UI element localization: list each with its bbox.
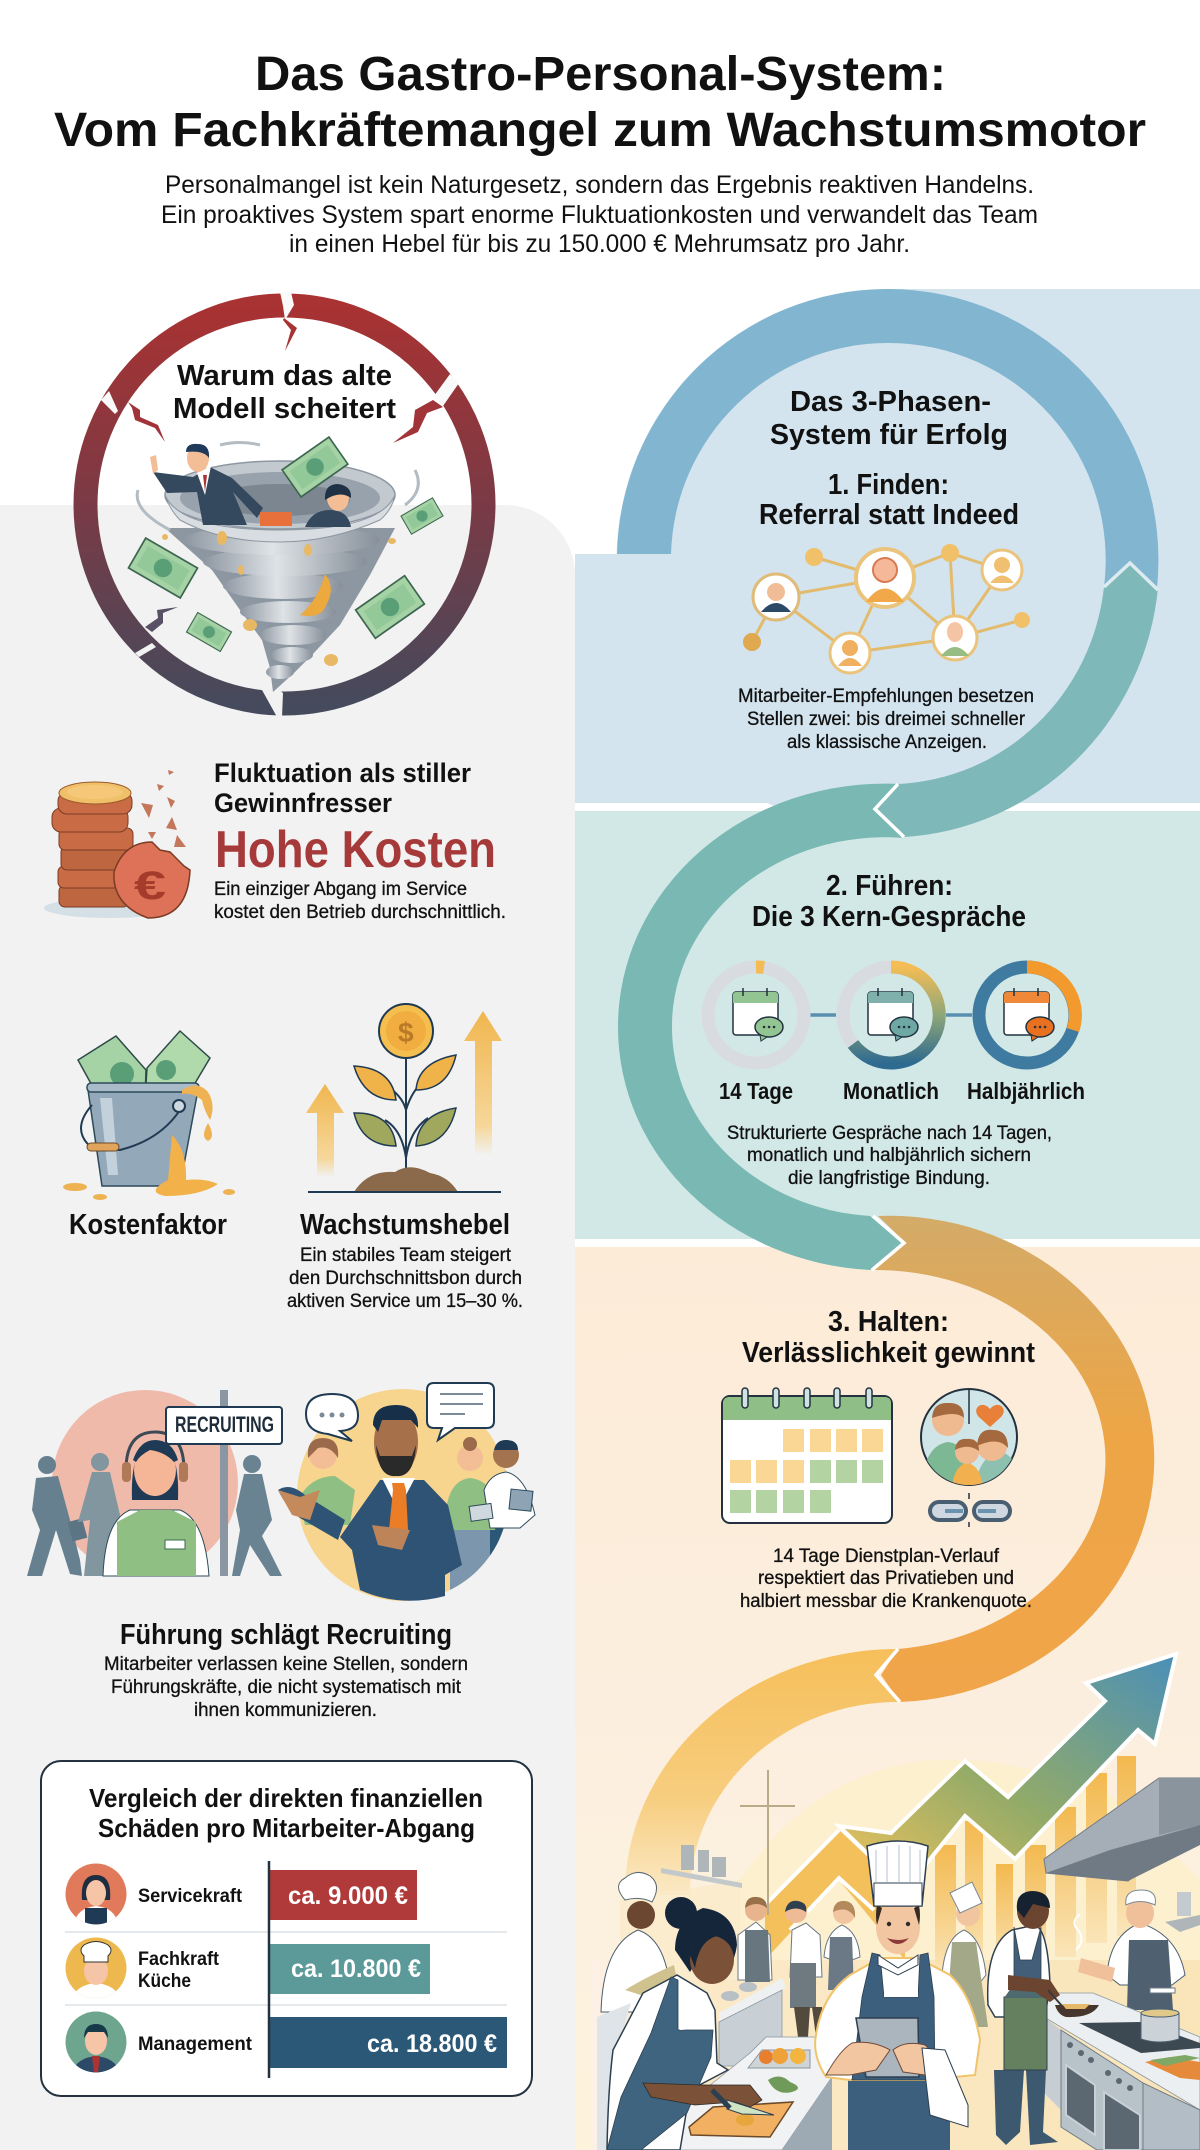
heading: 3. Halten [742, 1306, 1035, 1369]
subtitle text block [161, 171, 1038, 258]
icon: leaking bucket with money [63, 1031, 235, 1200]
stove cook [988, 1891, 1099, 2145]
ring labels: Monatlich [843, 1078, 939, 1104]
text: leadership: Mitarbeiter verlassen keine Stellen, sondern [104, 1654, 468, 1675]
text: structured talks: monatlich und halbjährlich sichern [747, 1145, 1031, 1166]
heading: 2. Führen [752, 870, 1026, 933]
row: Servicekraft [65, 1863, 417, 1925]
arrow: phase 2 teal band [618, 784, 904, 1270]
shelves [661, 1770, 1200, 1932]
arrow: phase 4 yellow band [625, 1649, 900, 1895]
text: referrals: als klassische Anzeigen. [787, 732, 987, 753]
heading: 1. Finden: Referral statt Indeed [759, 499, 1019, 531]
text: leadership: Führungskräfte, die nicht systematisch mit [111, 1677, 462, 1698]
panel: Fluktuation [44, 758, 506, 923]
text: referrals: Stellen zwei: bis dreimei schneller [747, 709, 1026, 730]
text: service cost: kostet den Betrieb durchschnittlich. [214, 902, 506, 923]
icon: family [921, 1388, 1020, 1486]
ring labels: Halbjährlich [967, 1078, 1085, 1104]
row: Fachkraft Küche: Fachkraft [138, 1949, 220, 1970]
row: Management [65, 2011, 507, 2073]
prep counter [680, 2036, 832, 2150]
arrow: teal connector [875, 563, 1158, 837]
illustration: recruiting [27, 1390, 282, 1576]
phase 3: Halten [722, 1306, 1035, 1612]
title [54, 48, 1146, 157]
text: structured talks: Strukturierte Gespräche nach 14 Tagen, [727, 1123, 1052, 1144]
text: leadership [104, 1654, 468, 1721]
illustration: leader with team [278, 1383, 535, 1610]
icon: referral network [743, 544, 1030, 673]
heading: Wachstumshebel: Wachstumshebel [300, 1209, 510, 1241]
text: Fluktuation als stiller Gewinnfresser [214, 758, 471, 818]
panel: Führung schlägt Recruiting [27, 1383, 535, 1721]
heading: 3. Halten: Verlässlichkeit gewinnt [742, 1337, 1035, 1369]
text: roster: 14 Tage Dienstplan-Verlauf [773, 1546, 1000, 1567]
row: Management: Management [138, 2034, 253, 2055]
lead chef [815, 1841, 980, 2150]
icon: broken coins: € [134, 864, 166, 908]
text: Fluktuation als stiller Gewinnfresser: Fluktuation als stiller [214, 758, 471, 788]
chart heading: Schäden pro Mitarbeiter-Abgang [98, 1813, 475, 1843]
text: roster: halbiert messbar die Krankenquote. [740, 1591, 1032, 1612]
ring labels [719, 1078, 1085, 1104]
row: Servicekraft: ca. 9.000 € [288, 1882, 408, 1910]
row: Fachkraft Küche: Küche [138, 1971, 191, 1992]
heading: 2. Führen: Die 3 Kern-Gespräche [752, 901, 1026, 933]
heading: Kostenfaktor: Kostenfaktor [69, 1209, 227, 1241]
icon: growing plant with coin and arrows [306, 1004, 502, 1192]
icon: tornado [137, 442, 418, 692]
row: Fachkraft Küche: ca. 10.800 € [291, 1955, 421, 1983]
text: referrals [738, 686, 1034, 753]
hood [1044, 1778, 1200, 1881]
heading: 3-Phasen-System: Das 3-Phasen- [790, 386, 991, 418]
panel: right column backgrounds [575, 289, 1200, 2150]
arrow: blue ring [617, 289, 1158, 588]
heading: Warum das alte Modell scheitert [173, 360, 396, 425]
text: stable team: aktiven Service um 15–30 %. [287, 1291, 523, 1312]
text: Fluktuation als stiller Gewinnfresser: Gewinnfresser [214, 788, 392, 818]
arrow: growth zigzag [839, 1654, 1176, 1890]
sign: RECRUITING [166, 1407, 282, 1444]
speech bubble left [306, 1394, 358, 1441]
panel: left grey column [0, 505, 575, 2150]
stove [1044, 1993, 1200, 2150]
heading: Warum das alte Modell scheitert: Warum das alte [177, 360, 392, 392]
icon: 14 Tage ring [708, 967, 804, 1063]
back counter [597, 1978, 786, 2150]
callout: Hohe Kosten: Hohe Kosten [215, 821, 496, 879]
cook with cutting board [607, 1897, 774, 2150]
text: roster: respektiert das Privatieben und [758, 1568, 1014, 1589]
icon: shift calendar [722, 1388, 892, 1523]
illustration: kitchen team [597, 1770, 1200, 2150]
heading: 1. Finden: 1. Finden: [828, 469, 949, 501]
icon: falling manager [150, 444, 351, 527]
icon: Monatlich ring [843, 967, 939, 1063]
subtitle text block: Personalmangel ist kein Naturgesetz, sondern das Ergebnis reaktiven Handelns. [165, 171, 1034, 199]
text: leadership: ihnen kommunizieren. [194, 1700, 377, 1721]
icons: flying money and coins [128, 437, 443, 666]
phase 1: Finden [738, 469, 1034, 753]
heading: 2. Führen: 2. Führen: [826, 870, 953, 902]
heading: Führung schlägt Recruiting: Führung schlägt Recruiting [120, 1619, 452, 1651]
arrow: phase 3 orange band [872, 1216, 1154, 1702]
icon: broken coins [44, 770, 190, 918]
broken ring [86, 292, 484, 717]
text: service cost [214, 879, 506, 923]
heading: 1. Finden [759, 469, 1019, 531]
panel: Wachstumshebel [287, 1004, 523, 1312]
text: roster [740, 1546, 1032, 1612]
chart heading: Vergleich der direkten finanziellen [89, 1783, 483, 1813]
title: Vom Fachkräftemangel zum Wachstumsmotor [54, 104, 1146, 157]
heading: 3-Phasen-System [770, 386, 1008, 451]
heading: 3. Halten: 3. Halten: [828, 1306, 949, 1338]
speech bubble right [427, 1383, 494, 1440]
text: structured talks: die langfristige Bindung. [788, 1168, 990, 1189]
icon: broken chain [930, 1493, 1010, 1527]
heading: 3-Phasen-System: System für Erfolg [770, 419, 1008, 451]
row: Servicekraft: Servicekraft [138, 1886, 243, 1907]
text: structured talks [727, 1123, 1052, 1189]
sign: RECRUITING: RECRUITING [175, 1412, 274, 1437]
subtitle text block: in einen Hebel für bis zu 150.000 € Mehrumsatz pro Jahr. [289, 230, 910, 258]
phase 2: Führen [708, 870, 1085, 1189]
ring labels: 14 Tage [719, 1078, 793, 1104]
row: Management: ca. 18.800 € [367, 2030, 497, 2058]
subtitle text block: Ein proaktives System spart enorme Fluktuationkosten und verwandelt das Team [161, 201, 1038, 229]
text: service cost: Ein einziger Abgang im Service [214, 879, 467, 900]
icon: growing plant with coin and arrows: $ [398, 1017, 414, 1048]
icon: Halbjährlich ring [979, 967, 1075, 1063]
back staff [601, 1872, 1185, 2037]
text: referrals: Mitarbeiter-Empfehlungen besetzen [738, 686, 1034, 707]
text: stable team [287, 1245, 523, 1312]
heading: Warum das alte Modell scheitert: Modell scheitert [173, 393, 396, 425]
panel: cost comparison chart [41, 1761, 532, 2096]
text: stable team: Ein stabiles Team steigert [300, 1245, 512, 1266]
row: Fachkraft Küche [65, 1937, 430, 1999]
panel: why the old model fails [86, 292, 484, 717]
panel: Kostenfaktor [63, 1031, 235, 1241]
text: stable team: den Durchschnittsbon durch [289, 1268, 522, 1289]
connectors [810, 1013, 972, 1017]
chart heading [89, 1783, 483, 1843]
title: Das Gastro-Personal-System: [255, 48, 946, 101]
kitchen backdrop: arch and chart bars [592, 1756, 1200, 2150]
